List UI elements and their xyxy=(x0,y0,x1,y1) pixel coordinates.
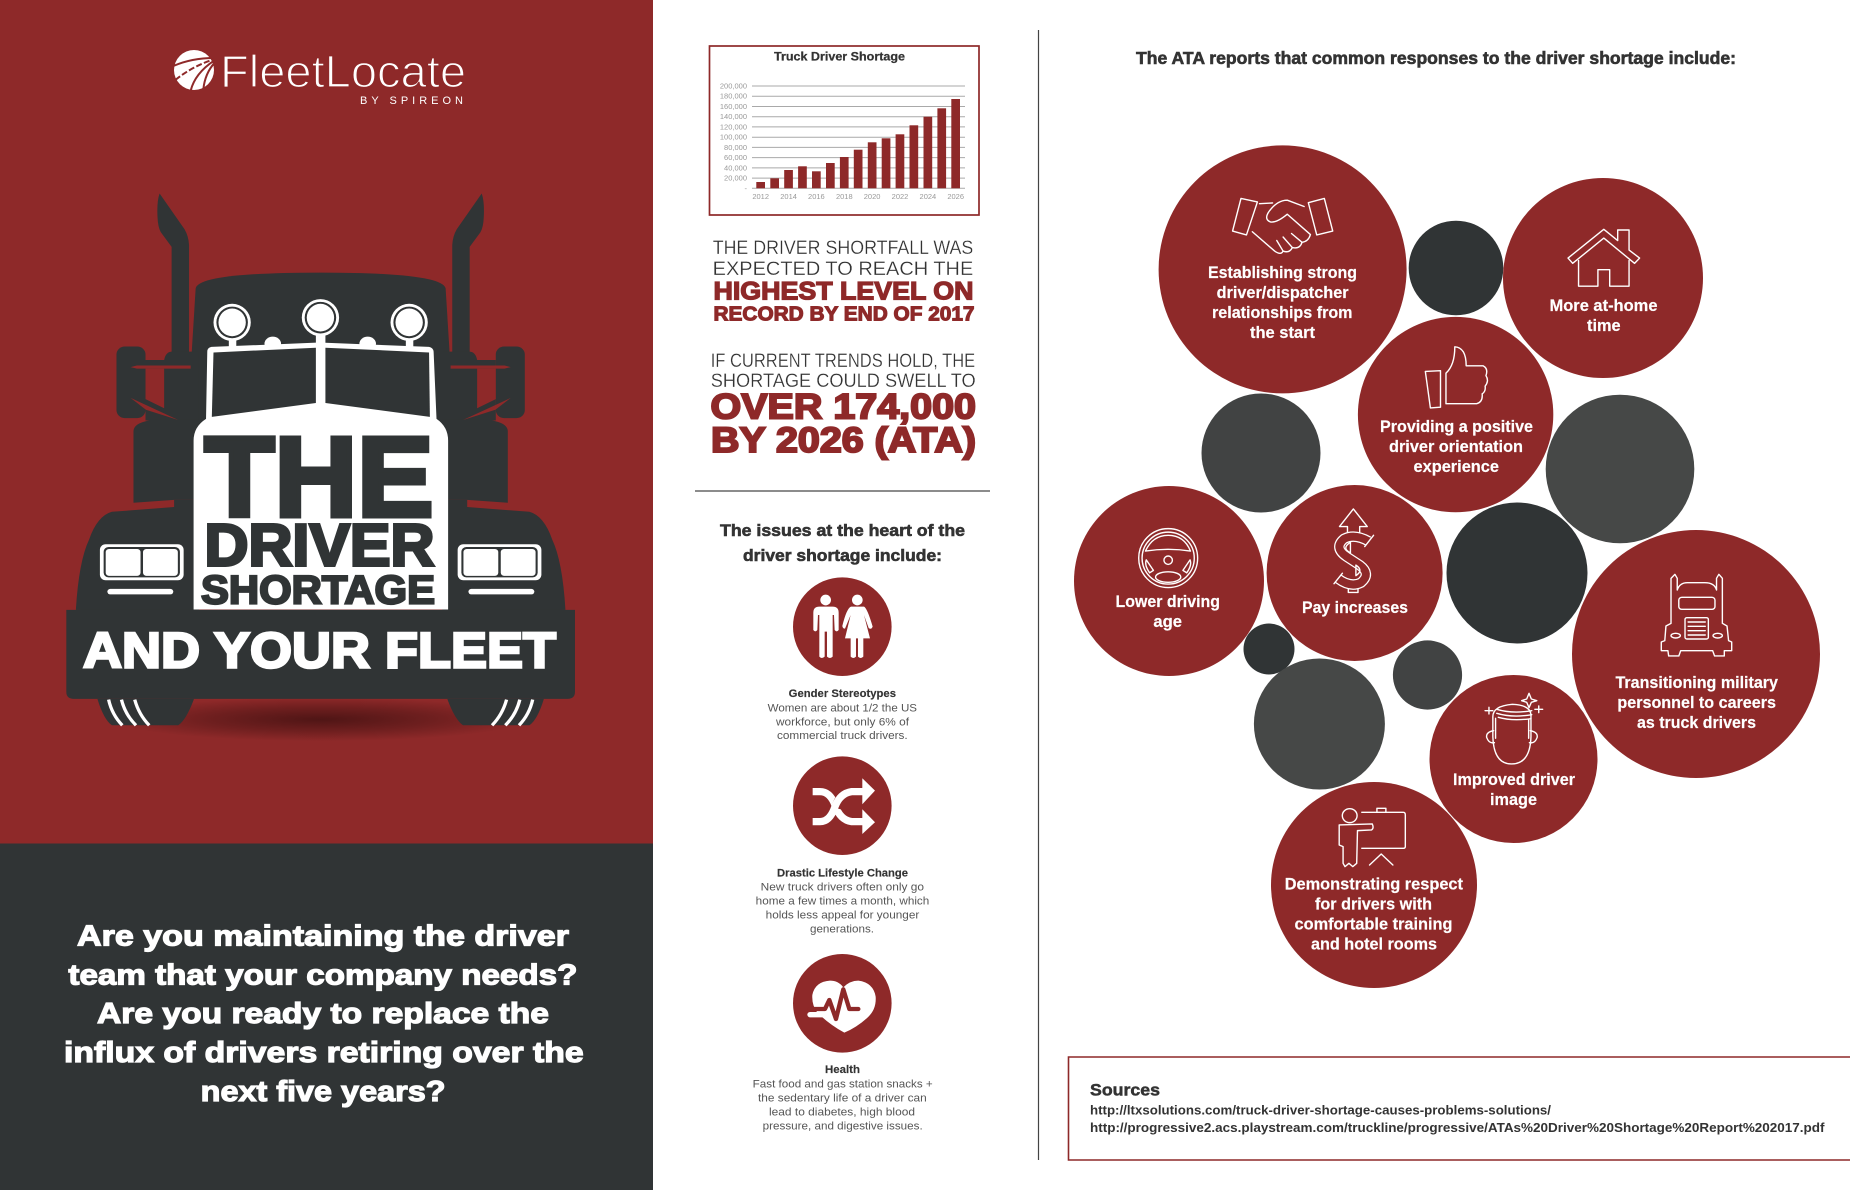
issue description: New truck drivers often only go xyxy=(761,882,924,894)
stat: 174,000 by 2026: SHORTAGE COULD SWELL TO xyxy=(711,370,976,392)
issue title: Health xyxy=(825,1064,860,1076)
issue description: lead to diabetes, high blood xyxy=(769,1107,915,1119)
bubble text: Providing a positive xyxy=(1380,417,1533,436)
bubble text: driver orientation xyxy=(1389,437,1523,456)
bubble text: Pay increases xyxy=(1302,598,1408,617)
bubble text: personnel to careers xyxy=(1617,693,1776,712)
bar chart: truck driver shortage xyxy=(710,46,979,215)
bubble: transitioning military personnel xyxy=(1572,530,1820,778)
logo: FleetLocate by Spireon xyxy=(173,46,466,107)
chart y-axis labels: 120,000 xyxy=(720,122,747,131)
bubble text xyxy=(1550,296,1658,335)
bubble text: Demonstrating respect xyxy=(1285,874,1463,893)
title: DRIVER: DRIVER xyxy=(204,512,434,578)
icon: steering wheel xyxy=(1139,529,1198,588)
icon: presenter at board xyxy=(1339,808,1405,867)
title: SHORTAGE: SHORTAGE xyxy=(201,569,435,613)
bubble text xyxy=(1285,874,1463,953)
stat: record shortfall: HIGHEST LEVEL ON xyxy=(714,278,974,306)
issue: drastic lifestyle change xyxy=(756,756,929,936)
bubble text: experience xyxy=(1414,457,1499,476)
issue description xyxy=(756,882,929,936)
panel: sources xyxy=(1068,1057,1850,1160)
issue description xyxy=(753,1079,933,1133)
chart y-axis labels: 40,000 xyxy=(724,163,747,172)
stat: record shortfall: RECORD BY END OF 2017 xyxy=(714,303,974,325)
bubble: driver/dispatcher relationships xyxy=(1159,145,1407,393)
chart x-axis labels xyxy=(752,192,964,201)
heading: ATA responses: The ATA reports that common responses to the driver shortage include: xyxy=(1136,48,1736,68)
chart x-axis labels: 2024 xyxy=(920,192,936,201)
bubble text: age xyxy=(1153,612,1182,631)
chart x-axis labels: 2026 xyxy=(947,192,964,201)
chart y-axis labels: 60,000 xyxy=(724,153,747,162)
stat: record shortfall: EXPECTED TO REACH THE xyxy=(713,258,973,280)
bubble text: Establishing strong xyxy=(1208,263,1357,282)
heading: issues: driver shortage include: xyxy=(743,546,942,565)
logo wordmark: FleetLocate xyxy=(220,46,466,97)
bubble text xyxy=(1116,592,1220,631)
chart y-axis labels: - xyxy=(744,184,748,193)
chart y-axis labels: 160,000 xyxy=(720,102,747,111)
text block: questions: Are you maintaining the driver xyxy=(77,920,569,952)
bubble text: comfortable training xyxy=(1294,914,1452,933)
icon: house xyxy=(1568,229,1640,286)
source url 1: http://ltxsolutions.com/truck-driver-shortage-causes-problems-solutions/ xyxy=(1090,1102,1551,1118)
bubble text: Improved driver xyxy=(1453,770,1575,789)
chart bars xyxy=(756,99,960,188)
issue title: Gender Stereotypes xyxy=(789,688,896,700)
logo tagline: BY SPIREON xyxy=(360,95,463,107)
chart x-axis labels: 2020 xyxy=(864,192,880,201)
heading: issues: The issues at the heart of the xyxy=(720,521,965,540)
chart y-axis labels: 140,000 xyxy=(720,112,747,121)
issue: health xyxy=(753,954,933,1133)
text block: questions: influx of drivers retiring over the xyxy=(64,1037,584,1069)
issue description: home a few times a month, which xyxy=(756,896,929,908)
stat: 174,000 by 2026: OVER 174,000 xyxy=(710,386,976,426)
bubble text xyxy=(1453,770,1575,809)
chart y-axis labels: 80,000 xyxy=(724,143,747,152)
icon: shuffle arrows xyxy=(793,756,892,855)
stat: 174,000 by 2026: IF CURRENT TRENDS HOLD, THE xyxy=(711,350,975,372)
bubble: positive orientation xyxy=(1358,317,1553,512)
issue description: workforce, but only 6% of xyxy=(775,717,910,729)
issue description: pressure, and digestive issues. xyxy=(763,1121,923,1133)
bubble text: for drivers with xyxy=(1315,894,1432,913)
text block: questions: Are you ready to replace the xyxy=(97,998,549,1030)
decorative dark circle cluster xyxy=(1202,221,1694,789)
stat: record shortfall xyxy=(713,237,974,325)
bubble text: Transitioning military xyxy=(1616,673,1779,692)
bubble text: driver/dispatcher xyxy=(1217,283,1349,302)
chart title: Truck Driver Shortage xyxy=(774,50,905,64)
chart y-axis labels: 180,000 xyxy=(720,92,747,101)
bubble text: image xyxy=(1490,790,1537,809)
chart x-axis labels: 2018 xyxy=(836,192,853,201)
bubble: more at-home time xyxy=(1503,178,1703,378)
issue: gender stereotypes xyxy=(768,577,917,742)
issue description: generations. xyxy=(810,924,874,936)
chart x-axis labels: 2012 xyxy=(752,192,769,201)
bubble text: Lower driving xyxy=(1116,592,1220,611)
issue description: Fast food and gas station snacks + xyxy=(753,1079,933,1091)
icon: road globe xyxy=(173,50,215,91)
bubble: demonstrating respect xyxy=(1271,782,1477,988)
icon: thumbs up xyxy=(1425,347,1487,408)
text block: questions: team that your company needs? xyxy=(68,960,577,992)
chart y-axis labels xyxy=(720,82,748,193)
bubble text: More at-home xyxy=(1550,296,1658,315)
icon: man and woman xyxy=(793,577,892,676)
chart x-axis labels: 2014 xyxy=(780,192,797,201)
bubble text xyxy=(1616,673,1779,732)
illustration: truck front with title xyxy=(66,193,575,741)
panel: left dark background xyxy=(0,844,653,1190)
bubble text: as truck drivers xyxy=(1637,713,1756,732)
text block: questions xyxy=(64,920,584,1108)
bubble text: relationships from xyxy=(1212,303,1352,322)
chart x-axis labels: 2022 xyxy=(892,192,908,201)
icon: handshake xyxy=(1233,198,1333,253)
issue description: the sedentary life of a driver can xyxy=(758,1093,927,1105)
text block: questions: next five years? xyxy=(201,1076,446,1108)
chart x-axis labels: 2016 xyxy=(808,192,825,201)
bubble text: time xyxy=(1587,316,1621,335)
icon: heart with pulse xyxy=(793,954,892,1053)
bubble: improved driver image xyxy=(1430,675,1598,843)
bubble: lower driving age xyxy=(1074,486,1264,676)
bubble text xyxy=(1208,263,1357,342)
bubble text xyxy=(1380,417,1533,476)
title: THE: THE xyxy=(204,414,434,540)
issue description: holds less appeal for younger xyxy=(766,910,920,922)
stat: 174,000 by 2026: BY 2026 (ATA) xyxy=(711,421,976,460)
panel: left red background xyxy=(0,0,653,844)
issue description xyxy=(768,703,917,742)
issue description: commercial truck drivers. xyxy=(777,730,908,742)
icon: head with sparkles xyxy=(1485,693,1543,764)
heading: issues xyxy=(720,521,965,565)
stat: record shortfall: THE DRIVER SHORTFALL WAS xyxy=(713,237,973,259)
truck body shapes xyxy=(66,193,575,741)
chart y-axis labels: 200,000 xyxy=(720,82,747,90)
bubble: pay increases xyxy=(1267,485,1443,661)
icon: truck xyxy=(1661,574,1732,656)
stat: 174,000 by 2026 xyxy=(710,350,976,460)
issue description: Women are about 1/2 the US xyxy=(768,703,917,715)
chart y-axis labels: 100,000 xyxy=(720,133,747,142)
title: AND YOUR FLEET: AND YOUR FLEET xyxy=(83,622,556,678)
chart y-axis labels: 20,000 xyxy=(724,174,747,183)
issue title: Drastic Lifestyle Change xyxy=(777,868,908,880)
bubble text: the start xyxy=(1250,323,1315,342)
bubble text: and hotel rooms xyxy=(1311,934,1437,953)
source url 2: http://progressive2.acs.playstream.com/truckline/progressive/ATAs%20Driver%20Shortage%20Report%202017.pdf xyxy=(1090,1120,1825,1135)
sources heading: Sources xyxy=(1090,1080,1160,1100)
icon: dollar sign with arrow xyxy=(1334,509,1374,592)
